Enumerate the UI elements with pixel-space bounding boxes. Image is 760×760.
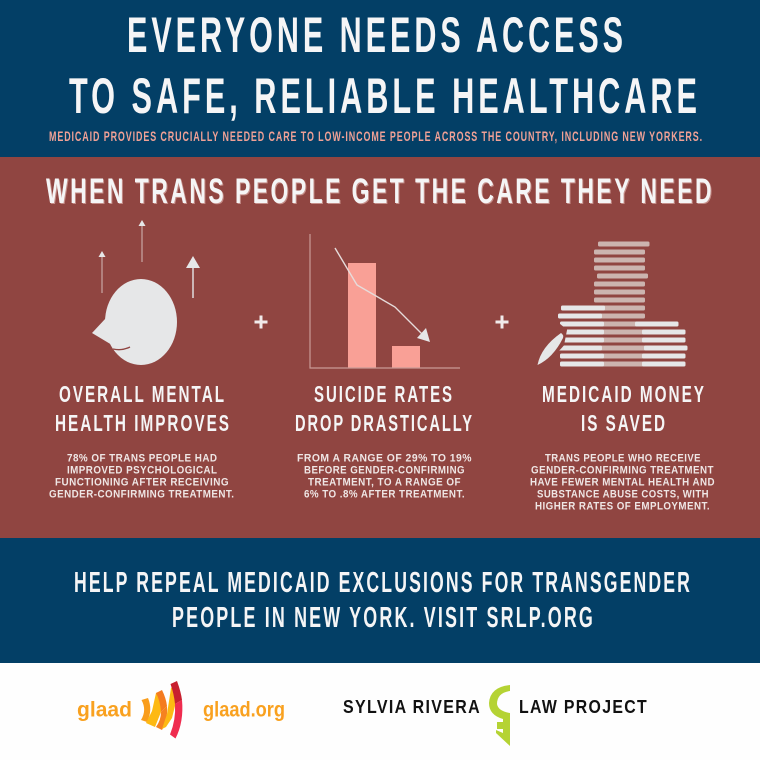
panel: benefits: [0, 157, 760, 538]
column text: SUBSTANCE ABUSE COSTS, WITH: [537, 488, 709, 500]
logo: glaad: glaad: [77, 698, 132, 722]
column text: HIGHER RATES OF EMPLOYMENT.: [535, 500, 710, 512]
column text: HAVE FEWER MENTAL HEALTH AND: [530, 476, 715, 488]
column text: BEFORE GENDER-CONFIRMING: [304, 464, 465, 476]
column heading: SUICIDE RATES: [314, 381, 454, 407]
column text: 6% TO .8% AFTER TREATMENT.: [304, 488, 465, 500]
column text: TREATMENT, TO A RANGE OF: [308, 476, 461, 488]
icon: glaad ribbon mark: [141, 681, 182, 738]
column text: 78% OF TRANS PEOPLE HAD: [67, 452, 218, 464]
plus sign: [254, 316, 268, 328]
column heading: HEALTH IMPROVES: [55, 410, 231, 436]
logo: glaad: [77, 681, 285, 738]
column: mental health: [49, 381, 234, 500]
logo: Sylvia Rivera Law Project: [343, 685, 648, 746]
column text: TRANS PEOPLE WHO RECEIVE: [545, 452, 701, 464]
panel: header: [0, 0, 760, 157]
logo: glaad: glaad.org: [203, 698, 285, 722]
column heading: OVERALL MENTAL: [59, 381, 226, 407]
call to action text: [74, 567, 692, 634]
bar chart: suicide rates falling: [310, 234, 460, 368]
column text: FUNCTIONING AFTER RECEIVING: [55, 476, 229, 488]
column heading: [55, 381, 231, 436]
column heading: [295, 381, 474, 436]
column text: GENDER-CONFIRMING TREATMENT: [531, 464, 714, 476]
column: money saved: [530, 381, 715, 512]
icon: stacks of money: [537, 242, 688, 366]
logo: Sylvia Rivera Law Project: LAW PROJECT: [519, 697, 648, 717]
column heading: DROP DRASTICALLY: [295, 410, 474, 436]
column text: IMPROVED PSYCHOLOGICAL: [67, 464, 218, 476]
column heading: [542, 381, 706, 436]
icon: head with rising arrows: [92, 220, 200, 365]
logo: Sylvia Rivera Law Project: SYLVIA RIVERA: [343, 697, 481, 717]
column text: [49, 452, 234, 500]
column: suicide rates: [295, 381, 474, 500]
panel: call to action: [0, 538, 760, 663]
panel: logos: [0, 663, 760, 760]
title: [69, 7, 701, 124]
column text: FROM A RANGE OF 29% TO 19%: [297, 452, 472, 464]
column text: [297, 452, 472, 500]
column text: [530, 452, 715, 512]
column heading: IS SAVED: [581, 410, 667, 436]
column text: GENDER-CONFIRMING TREATMENT.: [49, 488, 234, 500]
plus sign: [496, 316, 508, 328]
icon: green key: [489, 685, 510, 746]
